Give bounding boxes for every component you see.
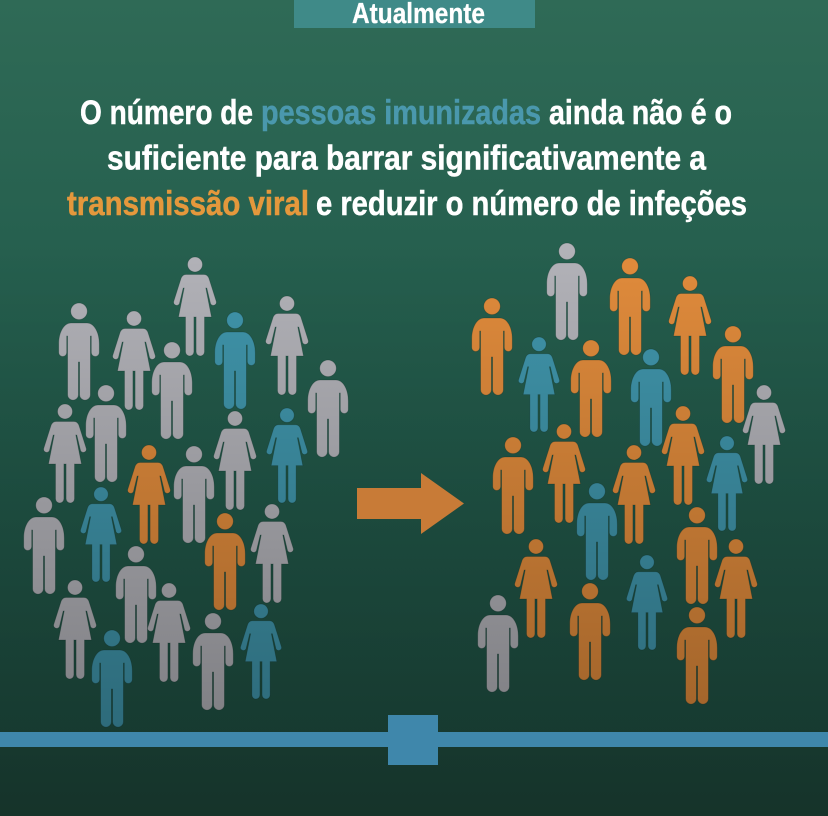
headline text: e reduzir o número de infeções	[316, 185, 747, 223]
header tab: Atualmente	[294, 0, 535, 30]
headline text	[67, 94, 747, 223]
crowd: before, mostly grey people	[24, 257, 348, 727]
headline text: O número de	[80, 94, 253, 132]
arrow: transition to right crowd	[357, 473, 464, 534]
headline text: suficiente para barrar significativamente a	[107, 140, 707, 178]
crowd: after, mostly orange people	[472, 243, 785, 704]
headline text: transmissão viral	[67, 185, 309, 223]
timeline bar with square marker	[0, 715, 828, 765]
headline text: ainda não é o	[549, 94, 732, 132]
headline text: pessoas imunizadas	[261, 94, 541, 132]
